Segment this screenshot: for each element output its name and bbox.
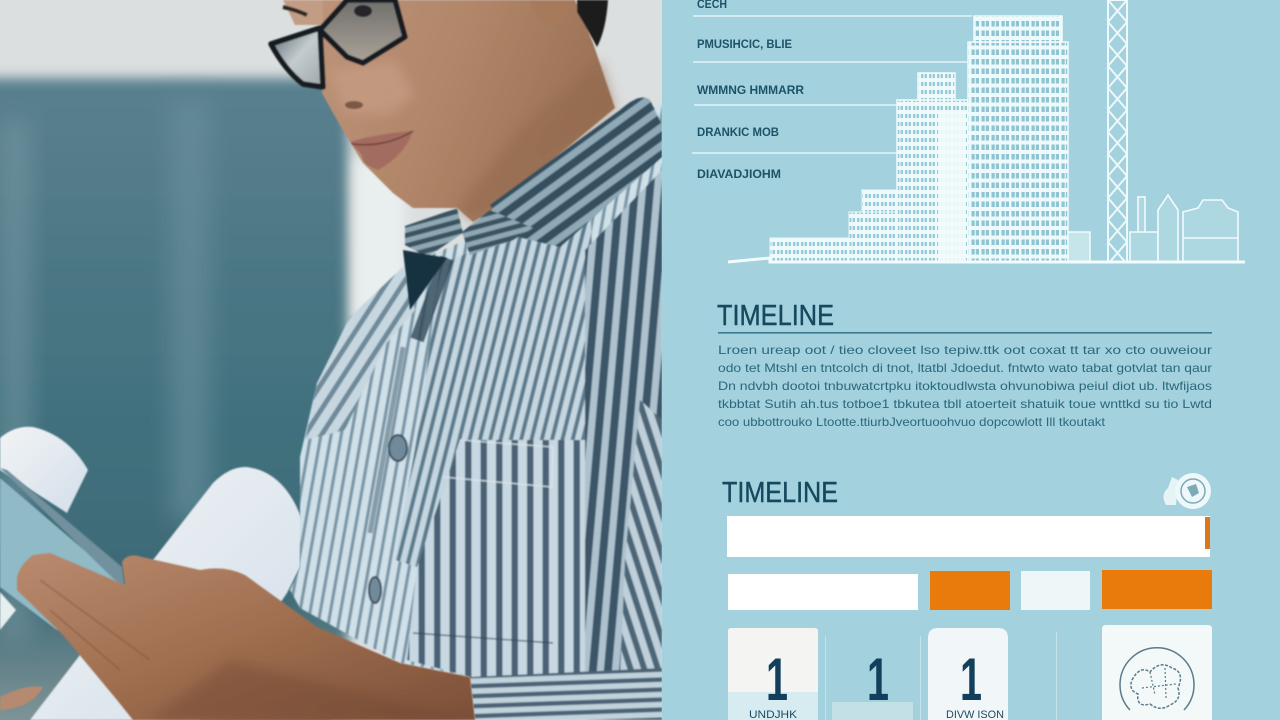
- small finger at bottom: [0, 686, 43, 710]
- card: step 1: 1: [766, 646, 788, 713]
- text block: description: [718, 343, 1212, 429]
- card: step 2: 1: [867, 646, 889, 713]
- ear: [530, 0, 572, 25]
- section: building labels: WMMNG HMMARR: [697, 83, 804, 97]
- text block: description: Lroen ureap oot / tieo cloveet lso tepiw.ttk oot coxat tt tar xo cto ouweiour: [718, 343, 1212, 357]
- hair: [577, 0, 608, 47]
- card: step 3: [928, 628, 1008, 720]
- label leader lines: [692, 16, 972, 153]
- mid low building: [849, 212, 897, 262]
- text block: description: coo ubbottrouko Ltootte.ttiurbJveortuoohvuo dopcowlott Ill tkoutakt: [718, 415, 1106, 429]
- heading rule: [718, 332, 1212, 334]
- mouth: [350, 131, 413, 170]
- shirt collar: [403, 98, 662, 310]
- heading: timeline: TIMELINE: [717, 300, 834, 332]
- paper strip at left edge: [0, 592, 16, 630]
- panel: photo of man holding a tablet: [0, 0, 662, 720]
- text block: description: tkbbtat Sutih ah.tus totboe1 tbkutea tbll atoerteit shatuik toue wnttkd su tio Lwtd: [718, 397, 1212, 411]
- second tower crown: [918, 73, 955, 100]
- faint divider line: [1056, 632, 1057, 720]
- section: building labels: DIAVADJIOHM: [697, 167, 781, 181]
- shirt pocket: [443, 440, 553, 487]
- tablet: [0, 468, 130, 630]
- man's shirt: [290, 100, 662, 720]
- card: step 2: [825, 636, 921, 720]
- illustration: city skyline with crane: [728, 0, 1245, 262]
- panel: blue infographic column: [662, 0, 1280, 720]
- main tower: [968, 42, 1068, 262]
- section: building labels: [697, 0, 804, 181]
- text block: description: Dn ndvbh dootoi tnbuwatcrtpku itoktoudlwsta ohvunobiwa peiul diot ub. ltwfijaos: [718, 379, 1212, 393]
- card: step 3: 1: [960, 646, 982, 713]
- timeline segment: orange: [930, 571, 1010, 610]
- icon: globe badge: [1163, 473, 1211, 509]
- crane: [1108, 0, 1127, 262]
- second tower solid band: [938, 112, 966, 262]
- shirt button upper: [389, 435, 407, 461]
- glasses: [271, 0, 405, 87]
- dark placket top: [417, 258, 447, 340]
- section: building labels: PMUSIHCIC, BLIE: [697, 37, 792, 51]
- second tower: [897, 100, 968, 262]
- industrial structures: [1130, 195, 1238, 262]
- timeline segment: white: [728, 574, 918, 610]
- lower pocket seam: [413, 633, 553, 643]
- shirt placket: [370, 347, 403, 533]
- man's hand: [0, 553, 475, 720]
- card: globe map: [1102, 625, 1212, 720]
- mid low building top: [862, 190, 897, 212]
- far eye skin: [282, 0, 324, 26]
- timeline segment: pale: [1021, 571, 1090, 610]
- timeline bar: full: [727, 516, 1210, 557]
- icon: world circle: [1120, 648, 1194, 710]
- paper roll front: [30, 467, 302, 720]
- card: step 1: [728, 628, 818, 720]
- low left building: [770, 238, 850, 262]
- dark undershirt: [403, 250, 447, 310]
- timeline segment: orange wide: [1102, 570, 1212, 609]
- photo background: [0, 0, 662, 720]
- ground line: [728, 258, 1245, 262]
- shirt button lower: [369, 577, 381, 603]
- nostril: [345, 101, 363, 109]
- far eyebrow: [283, 7, 307, 15]
- text block: description: odo tet Mtshl en tntcolch di tnot, ltatbl Jdoedut. fntwto wato tabat gotvlat tan qaur: [718, 361, 1212, 375]
- eye: [354, 5, 372, 17]
- section: building labels: DRANKIC MOB: [697, 125, 779, 139]
- paper roll back: [0, 427, 88, 513]
- main tower crown: [974, 16, 1062, 42]
- base annex: [1068, 232, 1090, 262]
- heading: timeline chart: TIMELINE: [722, 477, 838, 509]
- head and neck: [271, 0, 615, 222]
